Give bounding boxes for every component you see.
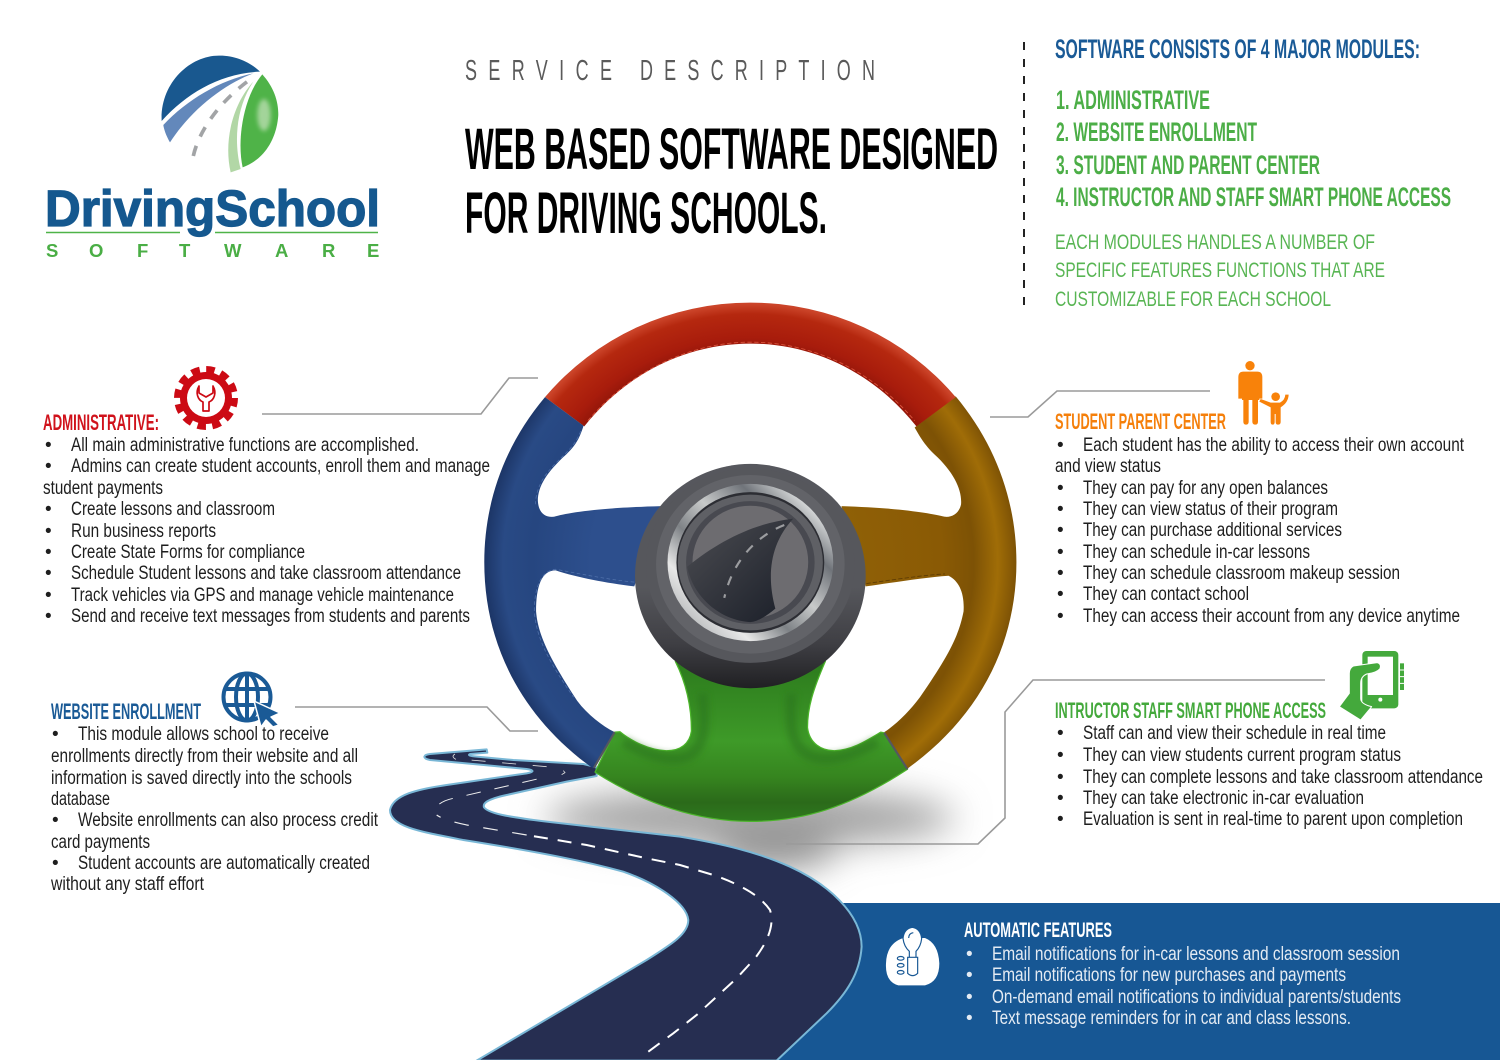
instructor staff list <box>1057 723 1483 830</box>
student parent center list: • <box>1057 520 1064 541</box>
automatic features heading: AUTOMATIC FEATURES <box>964 919 1112 942</box>
student parent center list: They can view status of their program <box>1083 499 1338 520</box>
modules list: 2. WEBSITE ENROLLMENT <box>1056 117 1257 147</box>
administrative list: All main administrative functions are accomplished. <box>71 435 419 456</box>
website enrollment list: This module allows school to receive <box>78 724 329 745</box>
administrative list: • <box>45 499 52 520</box>
panel: automatic features <box>886 919 1401 1029</box>
main title: WEB BASED SOFTWARE DESIGNED <box>465 117 998 182</box>
modules note: SPECIFIC FEATURES FUNCTIONS THAT ARE <box>1055 259 1385 282</box>
website enrollment list: card payments <box>51 832 150 853</box>
panel: administrative <box>43 370 490 627</box>
automatic features list: • <box>966 987 973 1008</box>
panel: instructor staff smart phone access <box>1055 651 1483 830</box>
website enrollment list: information is saved directly into the schools <box>51 768 352 789</box>
logo mark: road in a circle <box>162 56 278 172</box>
administrative list: • <box>45 456 52 477</box>
instructor staff list: • <box>1057 809 1064 830</box>
website enrollment list: • <box>52 724 59 745</box>
automatic features list: • <box>966 944 973 965</box>
connector: student parent center <box>990 391 1210 417</box>
modules list: 3. STUDENT AND PARENT CENTER <box>1056 150 1320 180</box>
wheel rim: blue left segment <box>484 397 661 769</box>
automatic features list: • <box>966 965 973 986</box>
administrative list: • <box>45 521 52 542</box>
modules note: CUSTOMIZABLE FOR EACH SCHOOL <box>1055 288 1331 311</box>
student parent center list: • <box>1057 435 1064 456</box>
website enrollment list: database <box>51 789 110 810</box>
instructor staff list: • <box>1057 788 1064 809</box>
administrative heading: ADMINISTRATIVE: <box>43 410 159 435</box>
instructor staff list: They can take electronic in-car evaluation <box>1083 788 1364 809</box>
administrative list: Create State Forms for compliance <box>71 542 305 563</box>
subtitle: service description: SERVICE <box>465 55 612 87</box>
logo: Driving School Software <box>45 56 380 261</box>
administrative list: student payments <box>43 478 163 499</box>
subtitle: service description: DESCRIPTION <box>640 55 875 87</box>
website enrollment list <box>50 724 379 895</box>
website enrollment list: Website enrollments can also process credit <box>78 810 379 831</box>
instructor staff list: • <box>1057 767 1064 788</box>
automatic features list: Email notifications for new purchases and payments <box>992 965 1346 986</box>
student parent center list: They can schedule in-car lessons <box>1083 542 1310 563</box>
administrative list: Send and receive text messages from students and parents <box>71 606 470 627</box>
administrative list: Create lessons and classroom <box>71 499 275 520</box>
road <box>390 749 862 1060</box>
administrative list <box>43 435 490 627</box>
website enrollment heading: WEBSITE ENROLLMENT <box>51 699 201 724</box>
connector: website enrollment <box>295 707 538 731</box>
website enrollment list: • <box>52 810 59 831</box>
main title: FOR DRIVING SCHOOLS. <box>465 181 827 246</box>
wheel rim: red top segment <box>545 303 956 426</box>
student parent center list: and view status <box>1055 456 1161 477</box>
website enrollment list: Student accounts are automatically created <box>78 853 370 874</box>
modules note: EACH MODULES HANDLES A NUMBER OF <box>1055 231 1375 254</box>
administrative list: • <box>45 435 52 456</box>
website enrollment list: without any staff effort <box>50 874 205 895</box>
administrative list: • <box>45 585 52 606</box>
administrative list: Track vehicles via GPS and manage vehicle maintenance <box>71 585 454 606</box>
icon: gear with wrench <box>178 370 234 426</box>
instructor staff list: • <box>1057 745 1064 766</box>
panel: website enrollment <box>50 673 379 895</box>
modules list: 1. ADMINISTRATIVE <box>1056 85 1210 115</box>
icon: hand holding phone <box>1339 651 1404 720</box>
icon: gear shift <box>886 927 939 985</box>
administrative list: • <box>45 563 52 584</box>
automatic features list <box>966 944 1401 1029</box>
student parent center list: They can contact school <box>1083 584 1249 605</box>
student parent center list: • <box>1057 606 1064 627</box>
automatic features list: Email notifications for in-car lessons and classroom session <box>992 944 1400 965</box>
website enrollment list: • <box>52 853 59 874</box>
logo wordmark: DrivingSchool <box>45 180 380 237</box>
student parent center list <box>1055 435 1465 627</box>
hub road emblem <box>687 519 793 622</box>
panel: automatic features background <box>770 903 1500 1060</box>
instructor staff list: Staff can and view their schedule in real time <box>1083 723 1386 744</box>
instructor staff list: • <box>1057 723 1064 744</box>
administrative list: Run business reports <box>71 521 216 542</box>
student parent center list: • <box>1057 542 1064 563</box>
wheel shadow <box>545 788 955 868</box>
student parent center list: • <box>1057 499 1064 520</box>
wheel hub <box>635 464 866 688</box>
icon: parent and child <box>1238 361 1289 425</box>
logo tagline: SOFTWARE <box>46 240 379 261</box>
administrative list: • <box>45 606 52 627</box>
wheel rim: green bottom spoke <box>594 661 907 821</box>
instructor staff list: They can view students current program status <box>1083 745 1401 766</box>
automatic features list: • <box>966 1008 973 1029</box>
administrative list: Admins can create student accounts, enroll them and manage <box>71 456 490 477</box>
administrative list: Schedule Student lessons and take classroom attendance <box>71 563 461 584</box>
panel: major modules <box>1055 34 1451 311</box>
modules list <box>1056 85 1451 212</box>
subtitle: service description <box>465 55 875 87</box>
student parent center list: They can purchase additional services <box>1083 520 1342 541</box>
student parent center list: • <box>1057 478 1064 499</box>
modules note <box>1055 231 1385 311</box>
connector: instructor staff <box>786 680 1325 844</box>
student parent center list: • <box>1057 563 1064 584</box>
icon: globe with cursor <box>224 673 280 727</box>
student parent center list: They can pay for any open balances <box>1083 478 1328 499</box>
student parent center list: They can schedule classroom makeup session <box>1083 563 1400 584</box>
student parent center heading: STUDENT PARENT CENTER <box>1055 409 1226 434</box>
automatic features list: On-demand email notifications to individual parents/students <box>992 987 1401 1008</box>
automatic features list: Text message reminders for in car and class lessons. <box>992 1008 1351 1029</box>
panel: student parent center <box>1055 361 1465 627</box>
wheel rim: gold right segment <box>841 396 1016 769</box>
steering wheel <box>484 303 1016 821</box>
main title <box>465 117 998 246</box>
administrative list: • <box>45 542 52 563</box>
connector: administrative <box>262 378 538 414</box>
student parent center list: • <box>1057 584 1064 605</box>
website enrollment list: enrollments directly from their website and all <box>51 746 358 767</box>
